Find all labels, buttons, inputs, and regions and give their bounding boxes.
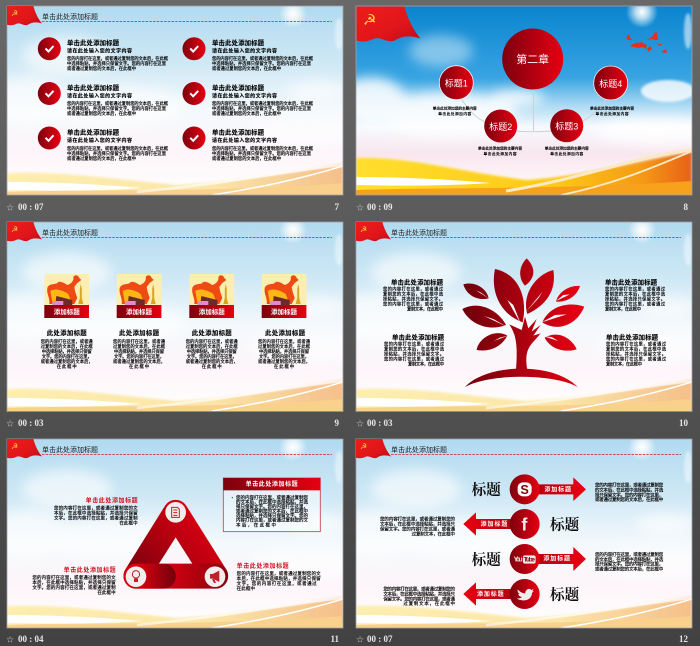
text block: bottom left: 您的内容打在这里，或者通过复制您的文 (32, 574, 116, 581)
flag (7, 6, 42, 25)
flag (7, 222, 42, 241)
item: row 1 right (182, 37, 314, 72)
slide 10 footer (356, 418, 688, 430)
text block: bottom right: 文字。您的内容打在这里，或者通过 (237, 580, 317, 587)
icon: light bulb (126, 566, 146, 587)
text block: top (54, 497, 138, 526)
heading: 单击此处添加标题 (42, 228, 98, 237)
card 2: 过复制您的文本后，在此框 (113, 343, 166, 350)
text block: lower left (384, 332, 445, 368)
item: row 2 left: 您的内容打在这里，或者通过复制您的文本后，在此框 (67, 100, 169, 107)
text block: upper right: 复制您的文本后，在此框中选 (605, 290, 666, 298)
text block: lower right: 复制您的文本后，在此框中选 (606, 346, 667, 352)
card 1: 或者通过复制您的文本后， (41, 358, 93, 365)
card 3: 过复制您的文本后，在此框 (186, 343, 238, 350)
flag: ☭ (11, 225, 18, 234)
text block: top: 您的内容打在这里，或者通过复制您的文 (54, 504, 138, 511)
card 3: 您的内容打在这里，或者通 (186, 338, 238, 345)
text block: bottom left: 在此框中 (97, 589, 116, 596)
text block: upper left: 您的内容打在这里，或者通过 (383, 286, 444, 292)
item: row 3 right: 请在此处输入您的文字内容 (212, 137, 277, 144)
callout box: 或者通过复制您的文本后，在此框中 (236, 508, 308, 515)
item: row 1 right: 请在此处输入您的文字内容 (212, 47, 277, 54)
text block: lower left: 复制文本，在此框中 (408, 360, 444, 368)
flag (356, 439, 391, 458)
card 4: 此处添加标题 (265, 328, 306, 337)
text block: bottom left: 本后，在此框中选择粘贴，并选择只保留 (32, 579, 116, 586)
text block: lower right: 择粘贴，并选择只保留文字。 (606, 350, 666, 358)
row: twitter: 标题 (550, 585, 580, 603)
item: row 1 right: 您的内容打在这里，或者通过复制您的文本后，在此框 (212, 55, 314, 62)
flag: ☭ (11, 442, 18, 451)
item: row 2 left (38, 82, 169, 117)
card 3: 此处添加标题 (192, 328, 232, 337)
text block: bottom left: 文字。您的内容打在这里，或者通过复制 (32, 584, 116, 591)
row: skype: S (520, 483, 529, 497)
card 3: 在此框中 (202, 363, 222, 370)
text block: upper left: 复制您的文本后，在此框中选 (383, 290, 444, 298)
callout box: 的文本后，在此框中选择粘贴，并选 (236, 499, 308, 506)
card 4: 在此框中 (274, 363, 294, 370)
heading: 单击此处添加标题 (42, 445, 98, 454)
flag (356, 222, 391, 241)
row: youtube: 或者通过复制您的文本后，在此框中 (595, 565, 664, 572)
slide 10 footer: ☆ (356, 420, 364, 430)
slide 12 footer: ☆ (356, 636, 364, 646)
text block: upper right: 择粘贴，并选择只保留文字。 (605, 296, 665, 302)
text block: lower left: 择粘贴，并选择只保留文字。 (384, 350, 444, 358)
panel: slide 11 (0, 433, 367, 628)
item: row 2 left: 或者通过复制您的文本后，在此框中 (67, 110, 136, 117)
row: skype: 您的内容打在这里，或者通过复制您 (595, 482, 664, 489)
social rows (380, 474, 664, 609)
card 3: 添加标题 (199, 307, 225, 316)
callout box: 您的内容打在这里，或者通过复制您 (236, 494, 308, 501)
node: title 1 (439, 66, 473, 100)
text block: lower right: 您的内容打在这里，或者通过 (606, 356, 667, 362)
text block: upper right: 您的内容打在这里，或者通过 (605, 286, 666, 292)
row: skype: 择只保留文字。您的内容打在这里， (595, 491, 663, 498)
flag (356, 6, 420, 42)
item: row 3 left: 您的内容打在这里，或者通过复制您的文本后，在此框 (67, 145, 169, 152)
item: row 1 left: 您的内容打在这里，或者通过复制您的文本后，在此框 (67, 55, 169, 62)
card 2 (113, 274, 166, 370)
row: facebook: 添加标题 (481, 520, 507, 528)
row: twitter (383, 579, 580, 609)
item: row 3 right: 中选择粘贴，并选择只保留文字。您的内容打在这里 (212, 150, 312, 157)
text block: top: 本后，在此框中选择粘贴，并选择只保留 (54, 509, 138, 516)
item: row 2 right: 或者通过复制您的文本后，在此框中 (212, 110, 281, 117)
item: row 1 left: 单击此处添加标题 (67, 38, 120, 47)
row: youtube: 的文本后，在此框中选择粘贴，并选 (595, 556, 664, 563)
item: row 3 left: 或者通过复制您的文本后，在此框中 (67, 155, 136, 162)
caption 4: 单击此处添加内容 (596, 111, 629, 116)
item: row 2 right (182, 82, 314, 117)
row: facebook: 标题 (550, 515, 580, 533)
connector lines (456, 89, 611, 132)
row: twitter: 保留文字。您的内容打在这里，或者通 (383, 595, 455, 602)
slide 10 footer: 00 : 03 (367, 418, 393, 428)
card 2: 或者通过复制您的文本后， (113, 358, 165, 365)
row: youtube: 标题 (472, 550, 501, 568)
item: row 1 left: 中选择粘贴，并选择只保留文字。您的内容打在这里 (67, 60, 167, 67)
card 4: 文字。您的内容打在这里， (259, 353, 309, 360)
caption 4: 单击此处添加您的主要内容 (590, 106, 634, 110)
row: skype: 添加标题 (544, 485, 571, 493)
text block: upper right: 单击此处添加标题 (605, 278, 658, 286)
node: chapter: 第二章 (516, 52, 549, 66)
card 2: 文字。您的内容打在这里， (114, 353, 164, 360)
slide 8 footer: 8 (684, 202, 688, 212)
row: facebook: 文本后，在此框中选择粘贴，并选择只 (380, 521, 455, 528)
row: twitter: 添加标题 (477, 590, 504, 598)
text block: lower left: 复制您的文本后，在此框中选 (384, 346, 445, 352)
slide 11 footer: 11 (330, 634, 339, 644)
slide 12 footer: 00 : 07 (367, 634, 393, 644)
text block: upper left (383, 278, 444, 312)
slide 7 footer: ☆ (6, 204, 14, 214)
card 4: 您的内容打在这里，或者通 (258, 338, 311, 345)
caption 2 (478, 146, 522, 156)
card 2: 您的内容打在这里，或者通 (113, 338, 166, 345)
panel: slide 9 (0, 216, 367, 412)
slide 9 footer: 00 : 03 (18, 418, 44, 428)
item: row 1 right: 中选择粘贴，并选择只保留文字。您的内容打在这里 (212, 60, 312, 67)
row: facebook: 您的内容打在这里，或者通过复制您的 (380, 516, 455, 523)
text block: lower right: 复制文本，在此框中 (606, 360, 642, 368)
tree illustration (462, 258, 584, 387)
row: facebook: 过复制文本，在此框中 (412, 530, 455, 537)
slide 9 footer: ☆ (6, 420, 14, 430)
text block: bottom left: 单击此处添加标题 (64, 566, 116, 574)
card 3: 或者通过复制您的文本后， (186, 358, 238, 365)
slide 10 footer: 10 (679, 418, 688, 428)
card 3 (186, 274, 238, 370)
row: facebook: 保留文字。您的内容打在这里，或者通 (380, 525, 455, 532)
caption 1: 单击此处添加您的主要内容 (433, 106, 477, 110)
node: title 3 (550, 109, 583, 142)
card 3: 文字。您的内容打在这里， (187, 353, 237, 360)
node: title 3: 标题3 (555, 120, 578, 132)
item: row 3 left (38, 126, 169, 162)
row: twitter: 文本后，在此框中选择粘贴，并选择只 (383, 591, 455, 598)
caption 3: 单击此处添加您的主要内容 (545, 146, 589, 150)
text block: bottom right: 在此框中 (237, 585, 255, 592)
slide 8 footer: ☆ (356, 204, 364, 214)
flag (7, 439, 42, 458)
panel: slide 12 (336, 433, 700, 628)
row: youtube: 添加标题 (543, 555, 570, 563)
card 2: 此处添加标题 (119, 328, 160, 337)
panel: slide 7 (0, 0, 367, 195)
row: skype: 的文本后，在此框中选择粘贴，并选 (595, 487, 664, 494)
icon: megaphone (205, 566, 225, 587)
callout box: 择只保留文字。您的内容打在这里， (236, 503, 308, 510)
text block: top: 在此框中 (119, 519, 138, 526)
item: row 3 right: 单击此处添加标题 (212, 128, 265, 136)
text block: upper right: 复制文本，在此框中 (605, 306, 641, 312)
text block: bottom left (32, 566, 116, 596)
flag: ☭ (363, 11, 376, 29)
slide 11 footer (6, 634, 339, 646)
text block: top: 文字。您的内容打在这里，或者通过复制 (54, 514, 138, 521)
node: title 4: 标题4 (599, 78, 622, 89)
text block: bottom right: 单击此处添加标题 (237, 562, 289, 570)
node: title 2 (484, 110, 517, 142)
flag: ☭ (11, 9, 18, 18)
row: youtube: 您的内容打在这里，或者通过复制您 (595, 551, 664, 558)
node: title 1: 标题1 (445, 78, 468, 88)
row: skype: 或者通过复制您的文本后，在此框中 (595, 496, 664, 503)
slide 12 footer (356, 634, 688, 646)
item: row 2 right: 您的内容打在这里，或者通过复制您的文本后，在此框 (212, 100, 314, 107)
item: row 2 right: 单击此处添加标题 (212, 83, 265, 92)
node: chapter (502, 28, 563, 90)
heading: 单击此处添加标题 (391, 445, 447, 454)
item: row 1 left (38, 37, 169, 72)
caption 3: 单击此处添加内容 (550, 151, 584, 156)
caption 1 (433, 106, 477, 116)
flag: ☭ (360, 442, 367, 451)
text block: upper left: 您的内容打在这里，或者通过 (383, 300, 444, 308)
caption 2: 单击此处添加您的主要内容 (478, 146, 522, 150)
item: row 1 left: 或者通过复制您的文本后，在此框中 (67, 65, 136, 72)
node: title 2: 标题2 (489, 121, 512, 132)
slide 11 footer: 00 : 04 (18, 634, 44, 644)
callout box (223, 478, 320, 532)
row: twitter: 您的内容打在这里，或者通过复制您的 (383, 586, 455, 593)
heading: 单击此处添加标题 (391, 228, 447, 237)
item: row 1 right: 或者通过复制您的文本后，在此框中 (212, 65, 281, 72)
caption 3 (545, 146, 589, 156)
slide 12 footer: 12 (679, 634, 688, 644)
slide 11 footer: ☆ (6, 636, 14, 646)
caption 2: 单击此处添加内容 (484, 151, 517, 156)
text block: lower left: 您的内容打在这里，或者通过 (384, 340, 445, 348)
card 4: 添加标题 (271, 307, 298, 316)
text block: upper right (605, 278, 666, 312)
slide 9 footer (6, 418, 340, 430)
slide 7 footer: 00 : 07 (18, 202, 44, 212)
card 3: 中选择粘贴，并选择只保留 (187, 348, 237, 355)
item: row 2 left: 单击此处添加标题 (67, 83, 120, 92)
callout box: 内容打在这里，或者通过复制您的文 (236, 517, 308, 524)
flag: ☭ (360, 225, 367, 234)
row: youtube: You (514, 557, 523, 564)
slide 7 footer (6, 202, 340, 214)
slide 7 footer: 7 (334, 202, 340, 212)
row: facebook: f (521, 515, 528, 535)
item: row 2 left: 中选择粘贴，并选择只保留文字。您的内容打在这里 (67, 105, 167, 112)
text block: upper left: 复制文本，在此框中 (407, 306, 443, 312)
card 2: 在此框中 (129, 363, 149, 370)
text block: lower right: 您的内容打在这里，或者通过 (606, 340, 667, 348)
item: row 2 right: 请在此处输入您的文字内容 (212, 92, 277, 99)
row: skype (472, 474, 664, 504)
row: skype: 标题 (472, 480, 501, 498)
text block: bottom right: 本后，在此框中选择粘贴，并选择只保留 (237, 575, 321, 582)
row: youtube (472, 544, 664, 574)
text block: upper right: 您的内容打在这里，或者通过 (605, 300, 666, 308)
panel: slide 10 (336, 216, 700, 412)
card 4: 过复制您的文本后，在此框 (258, 343, 311, 350)
icon: document (165, 502, 186, 523)
item: row 3 left: 单击此处添加标题 (67, 128, 120, 136)
item: row 3 left: 中选择粘贴，并选择只保留文字。您的内容打在这里 (67, 150, 167, 157)
card 4: 或者通过复制您的文本后， (258, 358, 310, 365)
slide 8 footer (356, 202, 688, 214)
card 1: 在此框中 (57, 363, 77, 370)
card 1: 过复制您的文本后，在此框 (41, 343, 93, 350)
card 4 (258, 274, 311, 370)
card 1: 您的内容打在这里，或者通 (41, 338, 93, 345)
text block: bottom right: 您的内容打在这里，或者通过复制您的文 (237, 570, 321, 577)
triangle diagram (32, 478, 321, 596)
text block: lower left: 单击此处添加标题 (392, 332, 445, 342)
card 1: 文字。您的内容打在这里， (42, 353, 92, 360)
item: row 3 right: 您的内容打在这里，或者通过复制您的文本后，在此框 (212, 145, 314, 152)
caption 4 (590, 106, 634, 116)
text block: lower right: 单击此处添加标题 (606, 332, 659, 342)
item: row 3 right: 或者通过复制您的文本后，在此框中 (212, 155, 281, 162)
callout box: 单击此处添加标题 (246, 480, 298, 488)
text block: bottom right (237, 562, 321, 592)
heading: 单击此处添加标题 (42, 12, 98, 21)
card 1: 中选择粘贴，并选择只保留 (42, 348, 92, 355)
callout box: 本后，在此框中 (236, 521, 276, 528)
panel: slide 8 (336, 0, 700, 195)
card 4: 中选择粘贴，并选择只保留 (259, 348, 309, 355)
row: youtube: Tube (524, 557, 535, 564)
text block: upper left: 择粘贴，并选择只保留文字。 (383, 296, 443, 302)
card 2: 中选择粘贴，并选择只保留 (114, 348, 164, 355)
item: row 3 right (182, 126, 314, 162)
card 2: 添加标题 (126, 307, 152, 316)
item: row 3 left: 请在此处输入您的文字内容 (67, 137, 132, 144)
card 1 (41, 274, 93, 370)
card 1: 此处添加标题 (47, 328, 87, 337)
text block: top: 单击此处添加标题 (86, 497, 138, 505)
item: row 1 right: 单击此处添加标题 (212, 38, 265, 47)
card 1: 添加标题 (54, 307, 80, 316)
callout box: 选择粘贴，并选择只保留文字。您的 (236, 512, 308, 519)
item: row 2 left: 请在此处输入您的文字内容 (67, 92, 132, 99)
row: youtube: 择只保留文字。您的内容打在这里， (595, 561, 663, 568)
caption 1: 单击此处添加内容 (438, 111, 472, 116)
node: title 4 (594, 66, 628, 100)
text block: lower right (606, 332, 667, 368)
text block: upper left: 单击此处添加标题 (391, 278, 444, 286)
item: row 2 right: 中选择粘贴，并选择只保留文字。您的内容打在这里 (212, 105, 312, 112)
slide 9 footer: 9 (334, 418, 340, 428)
item: row 1 left: 请在此处输入您的文字内容 (67, 47, 132, 54)
icon: birds (626, 32, 667, 53)
slide 8 footer: 00 : 09 (367, 202, 393, 212)
text block: lower left: 您的内容打在这里，或者通过 (384, 356, 445, 362)
row: twitter: 过复制文本，在此框中 (403, 600, 455, 607)
row: facebook (380, 509, 580, 539)
